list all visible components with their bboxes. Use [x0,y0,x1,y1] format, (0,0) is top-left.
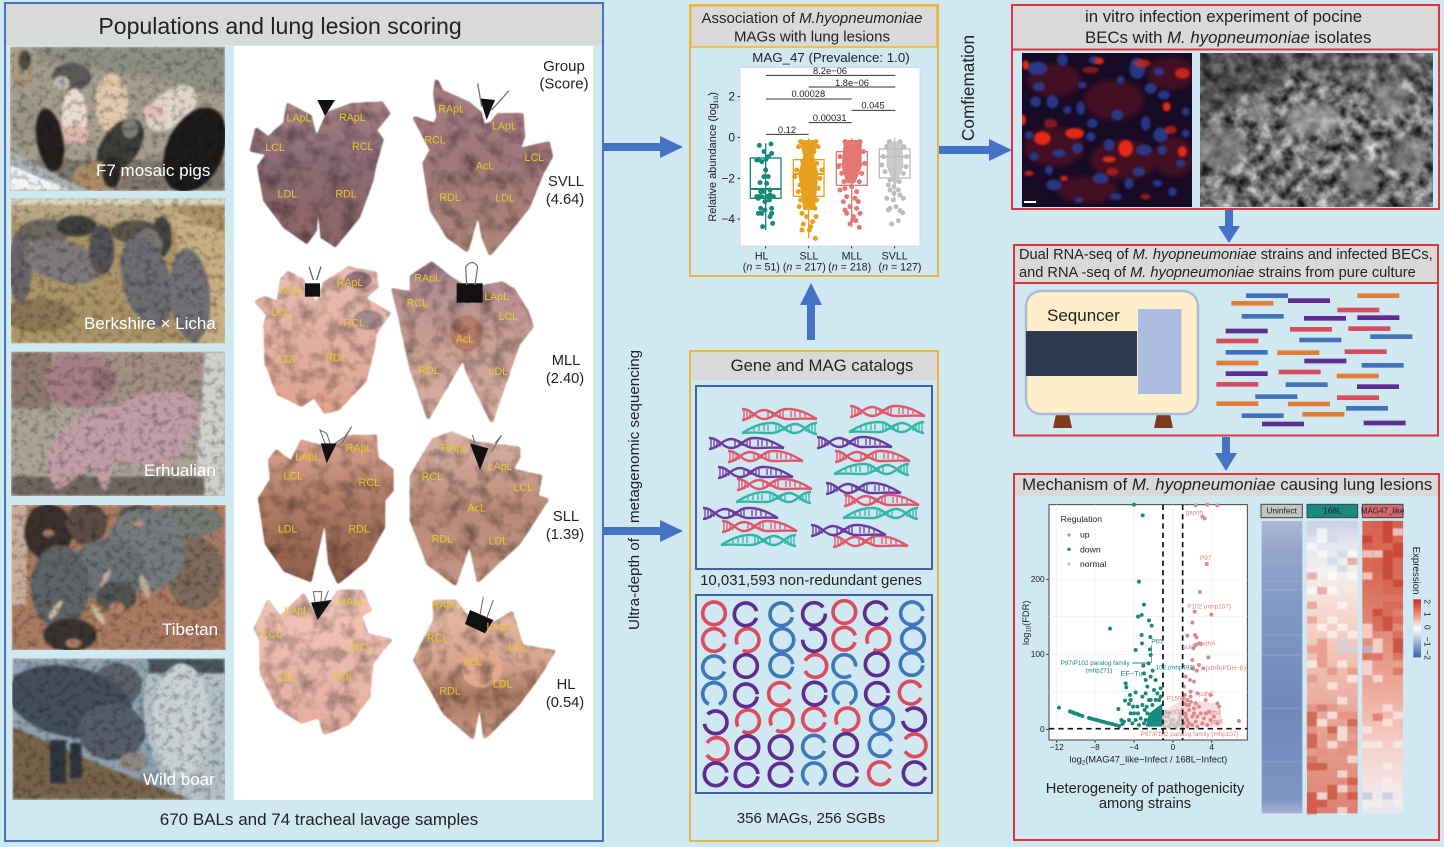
lung photo: HL back: LDL [493,679,513,691]
point annotations: pdhC [1199,691,1215,698]
rotated label: confirmation: Comfiemation [958,35,978,141]
arrow: catalogs up to association [800,283,822,340]
lung photo: HL back: AcL [463,656,482,668]
white lung photo board [234,46,593,800]
x axis labels: (n = 127) [879,261,921,273]
y axis title: ) [707,92,719,96]
lung photo: HL back: RApL [432,599,458,611]
lung photo: MLL back: RDL [418,365,440,377]
legend: up [1080,530,1090,540]
lung photo: SLL front [260,427,392,582]
lung photo: MLL back: AcL [456,334,474,346]
point annotations [1061,510,1246,738]
lung photo: MLL back [393,262,532,420]
panel frame [1012,5,1439,209]
caption: gene count: 10,031,593 non-redundant genes [700,572,922,589]
lung photo: SVLL back: RDL [439,192,461,204]
y axis: 200 [1031,574,1045,584]
legend: expression colour bar: −1 [1422,637,1432,647]
icon: sequencer: Sequncer [1047,306,1120,325]
photo: Tibetan: Tibetan [162,620,218,639]
lung photo: SVLL front: RDL [335,189,357,201]
micrograph: immunofluorescence [1021,53,1194,207]
y axis title: 10 [713,95,720,103]
axis tick marks and labels: −2 [721,171,735,185]
panel frame [1014,245,1438,436]
column: 168L expression [1307,521,1358,813]
lung photo: SLL back: AcL [467,503,486,515]
legend: expression colour bar: 2 [1422,599,1432,604]
label: SLL score: (1.39) [546,527,584,543]
lung photo: HL front: RApL [338,596,365,608]
x axis labels: (n = 217) [783,261,826,273]
lung photo: SLL back: RDL [432,533,453,545]
lung photo: SVLL back: RApL [438,103,465,115]
x axis labels: SLL [800,250,819,262]
lung photo: SLL front: LDL [278,524,298,536]
panel: in vitro infection experiment [1012,5,1439,209]
lung photo: SVLL front [252,100,388,245]
significance brackets: 8.2e−06 [813,66,847,76]
lung photo: SLL back: LCL [514,482,533,494]
lung photo: MLL front: RApL [337,277,363,289]
legend: down [1080,544,1101,554]
lung photo: SVLL back: LApL [492,120,517,132]
legend: expression colour bar: Expression [1410,547,1421,594]
photo: F7 mosaic pigs [10,46,225,191]
arrow: populations to catalogs [602,520,683,542]
panel: dual RNA-seq [1014,245,1438,436]
label: MLL score: (2.40) [546,371,584,387]
arrow: association to infection experiment [939,139,1012,161]
x axis labels: HL [755,250,769,262]
panel: populations and lung lesion scoring [1,3,603,841]
lung photo: SLL front: LApL [295,452,320,464]
lung photo: SVLL back: LDL [495,193,515,205]
micrograph: electron microscopy [1197,53,1433,207]
caption: heterogeneity of pathogenicity: among strains [1099,796,1191,812]
photo: F7 mosaic pigs: F7 mosaic pigs [96,161,210,180]
lung photo: SVLL front: LDL [278,189,297,201]
axis tick marks and labels: 2 [728,90,735,104]
heading band [691,6,937,47]
lung photo: HL back: RCL [427,633,448,645]
lung photo: SLL back: LApL [488,461,513,473]
lung photo: MLL back: RApL [414,273,441,285]
x axis labels: MLL [842,250,862,262]
heading band: Populations and lung lesion scoring [98,13,462,39]
caption: MAG count: 356 MAGs, 256 SGBs [737,810,885,827]
y axis: 100 [1031,649,1045,659]
photo: Erhualian [11,352,225,496]
axis tick marks and labels: −4 [721,212,735,226]
significance brackets: 1.8e−06 [835,78,869,88]
panel frame [1014,474,1439,840]
panel frame [5,3,603,841]
y axis title: Relative abundance (log [707,103,719,222]
y axis [1031,574,1049,734]
x axis: −12 [1050,742,1064,752]
point annotations: EF−Tu [1121,669,1143,678]
x axis: −8 [1090,742,1100,752]
lung photo: SVLL back: LCL [525,152,544,164]
lung photo: HL back: LCL [509,642,528,654]
heading band: MAGs with lung lesions [734,28,890,46]
x axis: −4 [1129,742,1139,752]
gene catalog box with DNA icons [696,386,932,569]
lung photo: HL front: RCL [351,642,372,654]
photo: wild boar: Wild boar [143,770,215,789]
lung photo: SVLL front: LApL [287,113,312,125]
down-regulated points [1059,505,1162,727]
lung photo: SLL back [412,433,547,583]
heading band [1014,246,1438,283]
panel: gene and MAG catalogs [690,351,938,841]
lung photo: SVLL front: RCL [352,141,373,153]
axis tick marks and labels: 0 [728,130,735,144]
lung photo: HL front [256,591,390,733]
column: MAG47_like expression [1362,521,1403,813]
lung photo: HL front: LApL [284,605,309,617]
arrow: infection to dual RNA-seq [1218,210,1240,243]
arrow: RNA-seq to mechanism [1215,437,1237,471]
y axis title: 10 [1027,625,1033,633]
heatmap [1261,504,1432,813]
lung photo: MLL back: RCL [407,298,428,310]
lung photo: MLL front: LApL [279,284,304,296]
group header: 168L: 168L [1323,505,1342,515]
group SVLL [879,138,910,224]
label: SLL score: SLL [553,509,579,525]
lung photo: MLL back: LDL [489,366,508,378]
label: HL score: HL [557,677,575,693]
lung photo: HL back [415,597,553,737]
lung photo: MLL back: LApL [484,291,509,303]
heading band: Mechanism of M. hyopneumoniae causing lung lesions [1022,475,1432,494]
up-regulated points [1164,505,1239,727]
lung photo: SLL front: RDL [348,524,370,536]
lung photo: HL back: RDL [439,685,461,697]
sequencing reads [1216,293,1412,426]
label: SVLL score: (4.64) [546,192,584,208]
significance brackets: 0.045 [861,101,885,111]
lung photo: SVLL front: RApL [339,112,366,124]
lung photo: MLL front: LDL [279,354,298,366]
point annotations: pdhJ [1207,709,1220,716]
legend: expression colour bar: 0 [1422,625,1432,630]
group header: Uninfect [1261,504,1302,518]
column: uninfected expression [1262,521,1302,813]
legend: expression colour bar: −2 [1422,650,1432,660]
lung photo: HL front: LDL [278,672,297,684]
lung photo: MLL front: LCL [271,307,291,319]
group header: Uninfect: Uninfect [1266,505,1298,515]
heading band: and RNA -seq of M. hyopneumoniae strains from pure culture [1019,265,1416,281]
lung photo: SLL back: LDL [489,535,508,547]
y axis: 0 [1040,724,1045,734]
point annotations: gapdh [1186,510,1204,517]
panel: association of M. hyopneumoniae MAGs with lung lesions [690,5,938,276]
point annotations: P97/P102 paralog family [1061,660,1130,667]
x axis: 4 [1209,742,1214,752]
legend [1061,514,1107,569]
x axis title: (MAG47_like−Infect / 168L−Infect) [1085,755,1227,765]
lung photo: SLL front: LCL [284,470,303,482]
x axis: 0 [1171,742,1176,752]
axis tick marks and labels [721,90,740,226]
lung photo: SLL back: RCL [422,471,443,483]
arrow: populations to association [602,136,683,158]
photo: Berkshire x Licha: Berkshire × Licha [84,314,216,333]
chart title: MAG_47 (Prevalence: 1.0) [752,50,910,65]
lung photo: HL front: LCL [263,629,282,641]
lung photo: SLL front: RCL [359,477,380,489]
label: SVLL score: SVLL [548,174,584,190]
y axis title: log [1021,633,1031,645]
lung photo: SVLL back: RCL [424,134,446,146]
legend: expression colour bar: 1 [1422,612,1432,617]
x axis title: 2 [1082,760,1086,766]
label: HL score: (0.54) [546,695,584,711]
significance brackets: 0.00031 [813,113,847,123]
significance brackets: 0.00028 [791,89,825,99]
point annotations: (mhp271) [1085,668,1112,675]
heading band: in vitro infection experiment of pocine [1085,7,1362,26]
heading band: BECs with M. hyopneumoniae isolates [1085,28,1371,47]
panel frame [690,5,938,276]
lung photo: SLL back: RApL [442,443,468,455]
point annotations: P97/P102 paralog family (mhp107) [1141,731,1238,738]
group header: MAG47_like: MAG47_like [1361,506,1405,515]
lung photo: MLL back: LCL [499,311,518,323]
x axis labels [743,246,921,273]
lung photo: SVLL back: AcL [476,160,494,172]
box plot [707,66,921,273]
group SLL [793,138,824,238]
lung photo: MLL front: RCL [344,318,365,330]
legend: group score heading: (Score) [539,76,589,92]
group MLL [836,138,867,227]
point annotations: P159 [1167,695,1182,702]
lung photo: HL front: RDL [333,672,355,684]
significance brackets [766,66,895,135]
panel: mechanism of M. hyopneumoniae causing lung lesions [1014,474,1439,840]
caption: heterogeneity of pathogenicity: Heterogeneity of pathogenicity [1046,781,1244,797]
x axis labels: (n = 218) [828,261,871,273]
point annotations: P102 (mhp107) [1187,604,1231,611]
point annotations: 102 (mhp493) [1156,664,1195,671]
icon: sequencer [1026,291,1198,428]
lung photo: MLL front [257,267,388,412]
threshold lines [1049,505,1247,740]
panel frame [690,351,938,841]
lung photo: SLL front: RApL [346,443,372,455]
point annotations: ptsK [1211,718,1224,725]
significance brackets: 0.12 [778,125,796,135]
photo: Tibetan [12,503,226,652]
legend: expression colour bar [1410,547,1432,660]
photo: Erhualian: Erhualian [144,461,216,480]
x axis title: log [1069,755,1082,765]
lung photo: SVLL front: LCL [265,142,285,154]
legend: normal [1080,559,1107,569]
heading band [6,4,602,45]
point annotations: secO [1165,709,1180,716]
photo: Berkshire x Licha [2,198,225,343]
point annotations: P65 [1151,638,1163,645]
label: MLL score: MLL [552,353,580,369]
heading band [1012,6,1439,50]
y axis title: (FDR) [1021,600,1031,626]
lung photo: HL back: LApL [487,621,512,633]
heading band: Gene and MAG catalogs [731,356,913,375]
lung photo: SVLL back [415,82,551,253]
legend: Regulation [1061,514,1102,524]
heading band: Dual RNA-seq of M. hyopneumoniae strains and infected BECs, [1019,247,1433,263]
heading band: Association of M.hyopneumoniae [702,10,922,27]
point annotations: P97 [1200,555,1212,562]
heading band [691,352,937,380]
x axis labels: SVLL [882,250,908,262]
caption: sample counts: 670 BALs and 74 tracheal lavage samples [160,810,478,829]
group HL [750,143,781,230]
group header: 168L [1307,504,1358,518]
rotated label: ultra-depth metagenomic sequencing: Ultra-depth ofmetagenomic sequencing [626,350,643,630]
point annotations: pdhA [1201,640,1216,647]
lung photo: MLL front: RDL [325,353,347,365]
legend: group score heading: Group [543,58,585,75]
point annotations: ackD [1182,644,1197,651]
x axis labels: (n = 51) [743,261,780,273]
group header: MAG47_like [1361,504,1405,518]
normal points [1164,712,1182,727]
x axis [1050,740,1214,752]
photo: wild boar [1,654,225,800]
MAG catalog box with genome rings [696,595,932,793]
point annotations: pdhB(PDH−B) [1206,665,1246,672]
volcano plot [1021,505,1247,766]
